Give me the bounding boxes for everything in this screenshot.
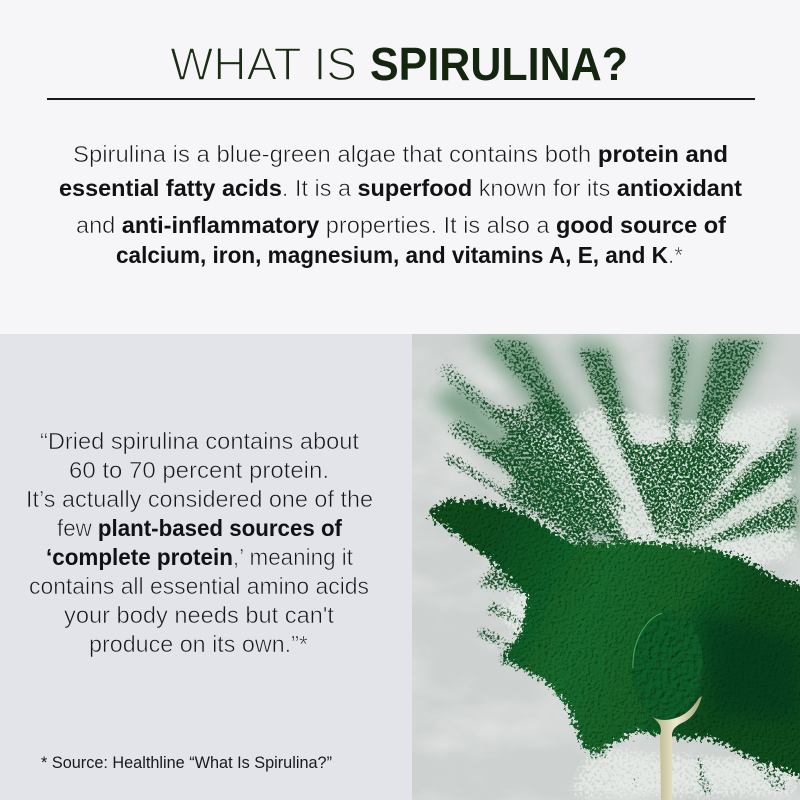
soft green haze behind rays [430,334,800,570]
source note: * Source: Healthline “What Is Spirulina?” [41,754,332,772]
quote text: contains all essential amino acids [29,573,369,599]
intro paragraph: Spirulina is a blue-green algae that contains both protein and [73,141,728,167]
intro paragraph: and anti-inflammatory properties. It is also a good source of [76,212,726,238]
intro paragraph: calcium, iron, magnesium, and vitamins A, E, and K.* [116,242,683,268]
photo: spirulina powder burst with spoon [412,334,800,800]
spoon [629,609,705,800]
shaded pile area right of spoon [695,610,800,720]
title [170,38,628,90]
quote text: your body needs but can't [64,602,335,628]
title divider line [47,98,755,100]
pale powder dust between rays [490,400,800,800]
quote text: few plant-based sources of [57,515,342,541]
quote text: “Dried spirulina contains about [40,428,360,454]
quote text: 60 to 70 percent protein. [69,457,329,483]
intro paragraph: essential fatty acids. It is a superfood known for its antioxidant [59,175,742,201]
panel: quote [0,334,412,800]
title: WHAT IS [170,38,357,90]
quote text: It’s actually considered one of the [26,486,373,512]
powder rays [428,334,800,798]
title: SPIRULINA? [370,38,628,90]
quote text [26,428,373,657]
powder pile [430,500,800,782]
quote text: ‘complete protein,’ meaning it [46,544,354,570]
intro paragraph [59,141,742,268]
quote text: produce on its own.”* [89,631,308,657]
